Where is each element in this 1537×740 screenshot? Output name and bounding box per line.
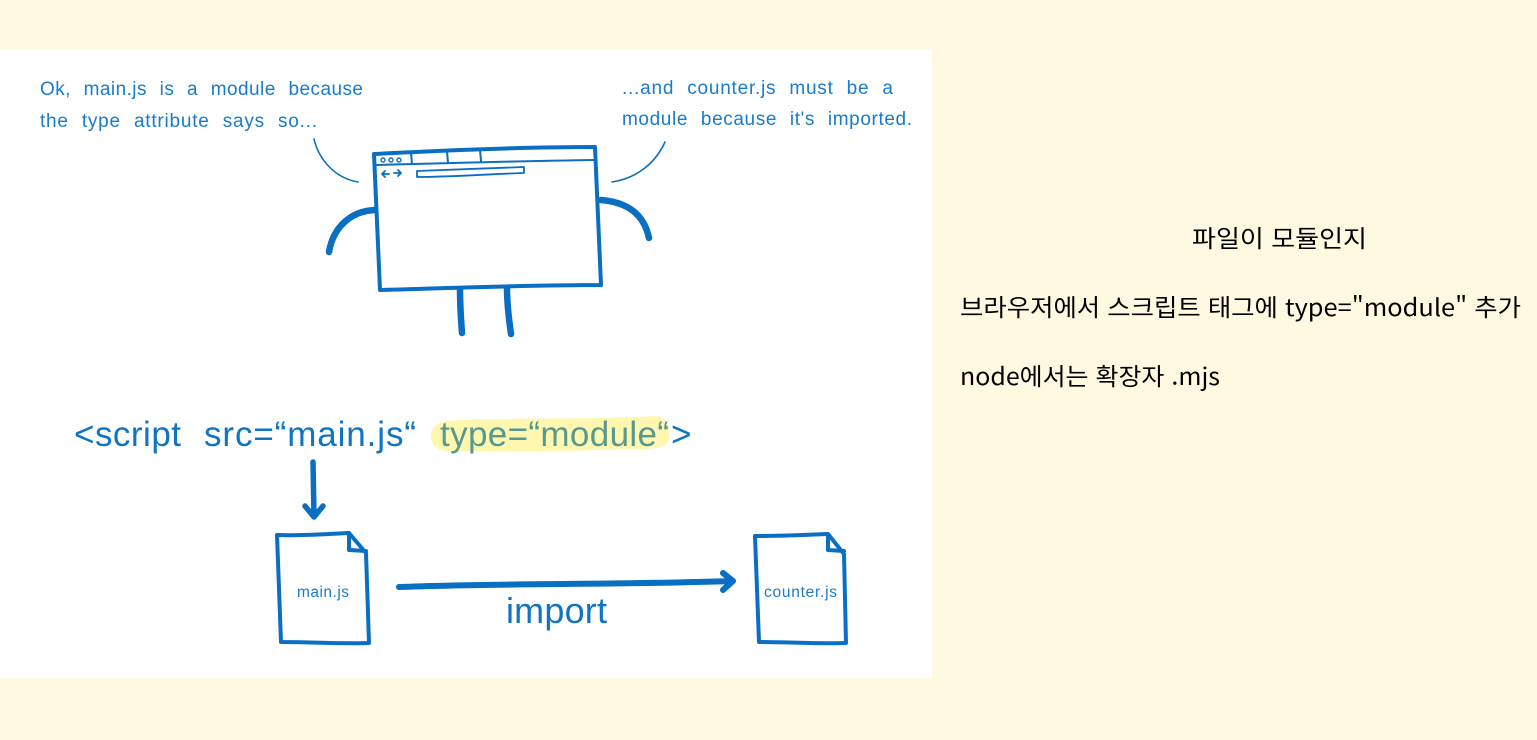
icon: counter.js file	[755, 534, 846, 643]
icon: browser character	[329, 147, 649, 334]
arrow: import	[399, 573, 733, 590]
node note: node에서는 확장자 .mjs	[960, 357, 1220, 392]
browser note: 브라우저에서 스크립트 태그에 type="module" 추가	[960, 288, 1521, 323]
code line: script tag: src=“main.js“	[204, 415, 416, 454]
character arms	[329, 210, 375, 252]
callout: left speech: the type attribute says so...	[40, 111, 317, 132]
icon: counter.js file: counter.js	[764, 584, 837, 601]
browser tab bar	[375, 150, 595, 165]
callout: right speech: module because it's imported.	[622, 109, 912, 130]
callout: left speech: Ok, main.js is a module because	[40, 79, 363, 100]
browser window	[374, 147, 601, 290]
browser address bar	[417, 167, 524, 177]
label: import: import	[506, 590, 607, 631]
browser nav arrows	[382, 170, 401, 177]
browser window buttons	[381, 158, 401, 162]
panel: illustration	[0, 50, 932, 678]
code line: script tag: >	[671, 415, 691, 454]
highlight	[431, 416, 669, 451]
callout line: right	[612, 142, 665, 182]
callout: right speech	[622, 78, 912, 130]
arrow: script to main.js	[305, 462, 323, 517]
code line: script tag: <script	[74, 415, 181, 454]
icon: main.js file: main.js	[297, 584, 349, 601]
callout line: left	[314, 139, 358, 182]
callout: left speech	[40, 79, 363, 132]
code line: script tag: type=“module“	[440, 415, 669, 454]
heading: 파일이 모듈인지	[1192, 219, 1367, 254]
text block: module notes	[960, 219, 1521, 392]
character legs	[460, 289, 462, 333]
code line: script tag	[74, 415, 691, 454]
icon: main.js file	[277, 533, 369, 643]
callout: right speech: ...and counter.js must be a	[622, 78, 893, 99]
